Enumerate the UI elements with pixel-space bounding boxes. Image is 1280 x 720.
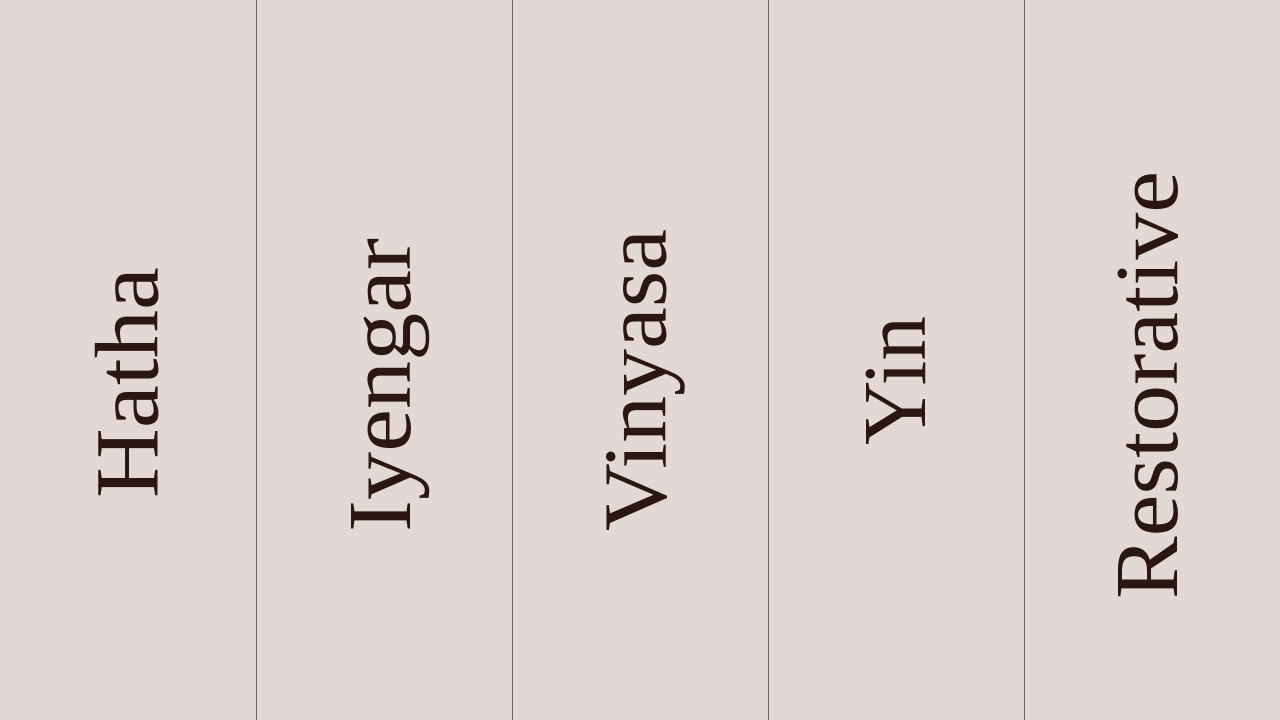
label: Hatha: Hatha	[78, 267, 178, 498]
label: Iyengar: Iyengar	[331, 238, 430, 532]
label: Restorative: Restorative	[1098, 171, 1197, 599]
label: Vinyasa: Vinyasa	[586, 229, 686, 531]
label: Yin: Yin	[846, 316, 945, 445]
